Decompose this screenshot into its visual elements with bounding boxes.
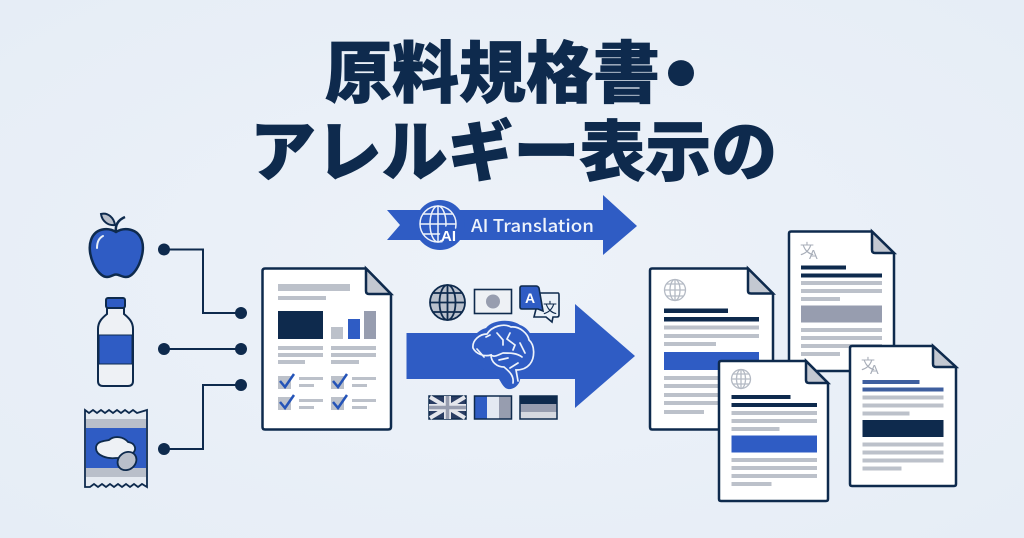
translated document: bottom right bbox=[850, 346, 956, 486]
banner arrow: AI Translation: AI Translation bbox=[471, 213, 594, 238]
translated document: top right: A bbox=[809, 247, 818, 262]
title: アレルギー表示の bbox=[250, 115, 777, 189]
icon: snack bag bbox=[85, 410, 147, 487]
icon: translate bubbles: 文 bbox=[543, 300, 557, 316]
translated document: left bbox=[650, 268, 773, 430]
translated document: bottom middle bbox=[719, 361, 828, 501]
flag: UK bbox=[429, 396, 466, 419]
title: ・ bbox=[636, 27, 726, 127]
translated document: bottom right: 文 bbox=[861, 356, 875, 372]
icon: bottle bbox=[98, 298, 133, 386]
connectors bbox=[158, 244, 247, 455]
icon: apple bbox=[90, 214, 143, 277]
title bbox=[250, 27, 777, 189]
flag: Japan bbox=[474, 290, 512, 314]
banner arrow: AI Translation bbox=[387, 195, 637, 255]
banner arrow: AI Translation: AI bbox=[441, 228, 456, 245]
big arrow with brain bbox=[406, 304, 635, 408]
icon: translate bubbles: A bbox=[525, 290, 535, 306]
flag: Germany style bbox=[520, 396, 557, 419]
translated document: top right bbox=[789, 232, 894, 371]
title: 原料規格書 bbox=[325, 37, 660, 112]
source document bbox=[262, 268, 391, 430]
icon: translate bubbles bbox=[520, 286, 559, 322]
translated document: top right: 文 bbox=[800, 241, 814, 257]
flag: France style bbox=[474, 396, 512, 419]
translated document: bottom right: A bbox=[870, 362, 879, 377]
icon: globe bbox=[430, 285, 465, 320]
